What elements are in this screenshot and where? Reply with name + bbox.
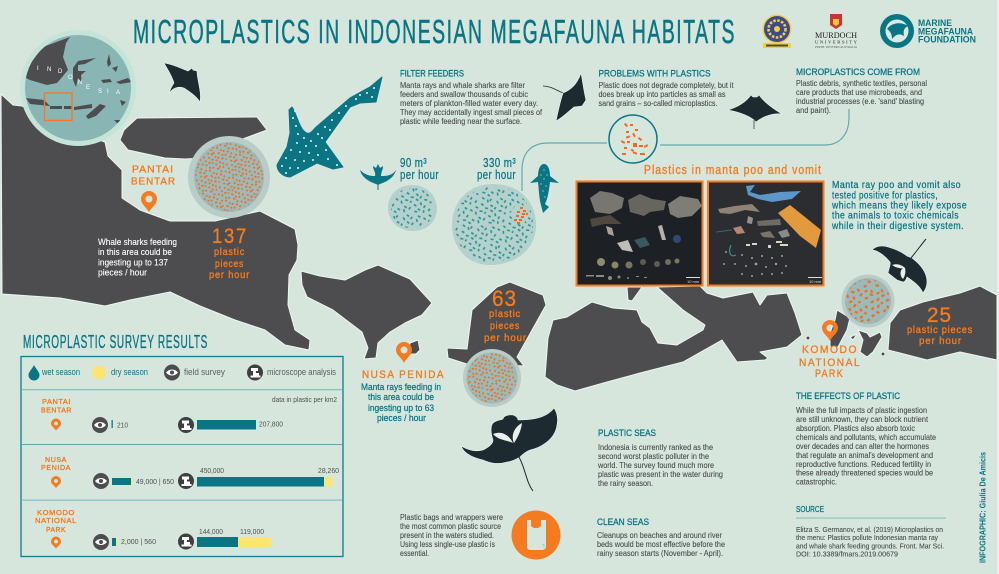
text block: clean seas: rainy season starts (November - April). (597, 548, 723, 558)
callout: 63 pieces per hour: plastic (489, 308, 521, 320)
chart: Komodo plastic sample (842, 274, 894, 328)
row: Pantai Bentar: BENTAR (41, 406, 72, 414)
text block: plastic bags (400, 512, 503, 558)
text block: effects of plastic (796, 391, 936, 486)
callout: 63 pieces per hour: 63 (492, 286, 517, 311)
icon: teal manta silhouette (360, 164, 396, 190)
text block: source: SOURCE (796, 505, 824, 514)
text block: clean seas: Cleanups on beaches and around river (597, 530, 722, 540)
icon: microscope (247, 364, 263, 380)
location: Nusa Penida (361, 342, 445, 424)
connector arrow: microplastics sources to whale shark (522, 109, 849, 191)
logo: Marine Megafauna Foundation: MARINE (918, 18, 952, 28)
row: Komodo National Park (35, 508, 271, 550)
chart: 90 m3 water blob (388, 185, 437, 231)
legend: microscope analysis (267, 367, 336, 377)
text block: plastic bags: essential. (400, 548, 429, 558)
text block: manta ray poo and vomit: the animals to toxic chemicals (832, 210, 959, 222)
legend: wet season (41, 367, 80, 377)
icon: large manta ray (461, 408, 558, 491)
text block: manta ray poo and vomit: which means they likely expose (831, 200, 967, 212)
location: Komodo National Park: KOMODO (802, 344, 858, 356)
text block: whale sharks feeding (98, 237, 177, 278)
text block: microplastics come from: industrial processes (e.e. 'sand' blasting (796, 96, 924, 106)
callout: 137 pieces per hour: pieces (215, 258, 244, 270)
row: Nusa Penida: 49,000 | 650 (136, 477, 174, 486)
callout: 25 pieces per hour: per hour (919, 335, 962, 347)
icon: pin (141, 191, 157, 212)
text block: problems with plastics: does break up into particles as small as (598, 89, 726, 99)
callout: 25 pieces per hour: 25 (927, 304, 952, 327)
location: Pantai Bentar (131, 164, 176, 212)
logo: Murdoch University: MURDOCH (815, 31, 857, 40)
row: Pantai Bentar: 207,800 (259, 420, 283, 428)
text block: whale sharks feeding: ingesting up to 137 (98, 258, 168, 268)
logo: Marine Megafauna Foundation (880, 14, 976, 48)
icon: field survey eye (164, 364, 180, 380)
legend (28, 364, 336, 381)
label: 330 cubic metres per hour: 330 m³ (483, 156, 516, 170)
legend: field survey (184, 367, 225, 377)
text block: filter feeders: FILTER FEEDERS (400, 68, 464, 80)
label: 330 cubic metres per hour: per hour (477, 168, 516, 182)
location: Komodo National Park: NATIONAL (799, 357, 861, 369)
right page edge (998, 0, 999, 574)
location: Pantai Bentar: BENTAR (131, 176, 176, 188)
heading: plastics in manta poo and vomit: Plastics in manta poo and vomit (644, 163, 822, 177)
icon: right manta ray (872, 239, 927, 293)
location: Nusa Penida: this area could be (368, 392, 434, 403)
text block: whale sharks feeding: pieces / hour (98, 268, 148, 278)
location: Komodo National Park: PARK (815, 368, 844, 380)
logo: Marine Megafauna Foundation: FOUNDATION (918, 34, 976, 44)
map: land masses (1, 94, 997, 391)
text block: filter feeders: plastic while feeding near the surface. (400, 116, 522, 126)
logo: Murdoch University (815, 14, 858, 49)
logo: university seal (762, 14, 792, 48)
text block: microplastics come from (796, 67, 927, 115)
icon: manta top right (728, 95, 782, 129)
text block: source: and whale shark feeding grounds. Front. Mar Sci. (796, 542, 944, 550)
row: Komodo National Park: PARK (46, 525, 66, 534)
label: 330 cubic metres per hour (477, 156, 516, 182)
text block: filter feeders: They may accidentally ingest small pieces of (400, 107, 543, 117)
locator globe (20, 30, 136, 146)
row: Komodo National Park: KOMODO (37, 508, 75, 517)
text block: effects of plastic: these already threatened species would be (796, 468, 933, 478)
text block: manta ray poo and vomit (831, 180, 967, 232)
text block: problems with plastics: Plastic does not degrade completely, but it (598, 80, 734, 90)
text block: whale sharks feeding: Whale sharks feeding (98, 237, 177, 248)
row: Komodo National Park: NATIONAL (35, 516, 77, 525)
text block: effects of plastic: that regulate an animal's development and (796, 450, 933, 460)
text block: microplastics come from: Plastic debris, synthetic textiles, personal (796, 78, 927, 88)
text block: problems with plastics: PROBLEMS WITH PLASTICS (598, 68, 710, 80)
row: Komodo National Park: 144,000 (199, 527, 223, 536)
icon: wet season drop (28, 365, 40, 381)
label: 90 cubic metres per hour: per hour (400, 168, 439, 182)
text block: microplastics come from: and paint). (796, 105, 831, 115)
text block: source: DOI: 10.3389/fmars.2019.00679 (796, 550, 898, 558)
panel: survey results (21, 356, 343, 556)
chart: Nusa Penida plastic sample (463, 349, 521, 407)
photo scale label: 10 mm (687, 279, 700, 284)
text block: plastic bags: Using less single-use plastic is (400, 539, 495, 549)
row: Pantai Bentar: PANTAI (42, 397, 71, 406)
text block: filter feeders: meters of plankton-filled water every day. (400, 98, 538, 108)
text block: source: Elitza S. Germanov, et al. (2019) Microplastics on (796, 525, 943, 534)
location: Nusa Penida: Manta rays feeding in (361, 382, 441, 393)
text block: plastic seas: world. The survey found much more (597, 460, 714, 470)
text block: plastic bags: Plastic bags and wrappers were (400, 512, 503, 522)
callout: 25 pieces per hour (907, 304, 973, 347)
callout: 25 pieces per hour: plastic pieces (907, 324, 973, 336)
chart: Pantai Bentar plastic sample (188, 136, 270, 218)
text block: plastic bags: the most common plastic source (400, 521, 501, 531)
text block: plastic bags: present in the waters studied. (400, 530, 494, 540)
text block: microplastics come from: MICROPLASTICS COME FROM (796, 67, 920, 78)
text block: source (796, 505, 946, 558)
callout: 63 pieces per hour: pieces (490, 320, 520, 332)
text block: effects of plastic: are still unknown, they can block nutrient (796, 414, 929, 424)
text block: source: the menu: Plastics pollute Indonesian manta ray (796, 533, 938, 542)
label: 90 cubic metres per hour (400, 156, 439, 182)
location: Nusa Penida: ingesting up to 63 (368, 403, 434, 414)
text block: plastic seas: the rainy season. (598, 478, 653, 488)
text block: filter feeders: feeders and swallow thousands of cubic (400, 89, 529, 99)
icon: small whale shark (530, 164, 559, 213)
text block: effects of plastic: absorption. Plastics also absorb toxic (796, 423, 916, 433)
row: Nusa Penida: 450,000 (200, 466, 224, 475)
credit: infographic author: INFOGRAPHIC: Giulia De Amicis (978, 452, 988, 563)
label: 90 cubic metres per hour: 90 m³ (400, 156, 427, 170)
text block: microplastics come from: care products that use microbeads, and (796, 87, 922, 97)
text block: filter feeders (400, 68, 543, 126)
text block: problems with plastics (598, 68, 734, 108)
row: Komodo National Park: 119,000 (240, 527, 264, 536)
heading: microplastic survey results: MICROPLASTIC SURVEY RESULTS (23, 332, 208, 352)
row: Nusa Penida: 28,260 (318, 466, 339, 475)
text block: effects of plastic: While the full impacts of plastic ingestion (796, 405, 927, 415)
logo: Murdoch University: UNIVERSITY (815, 40, 858, 44)
location: Pantai Bentar: PANTAI (132, 164, 174, 176)
text block: whale sharks feeding: in this area could be (98, 247, 172, 258)
text block: clean seas: CLEAN SEAS (597, 517, 649, 528)
location: Nusa Penida: pieces / hour (377, 413, 427, 424)
text block: clean seas (597, 517, 725, 558)
text block: effects of plastic: THE EFFECTS OF PLASTIC (796, 391, 900, 402)
text block: problems with plastics: sand grains – so-called microplastics. (598, 98, 718, 108)
globe label: INDONESIA (37, 66, 120, 96)
location: Komodo National Park (799, 320, 861, 380)
text block: manta ray poo and vomit: while in their digestive system. (831, 221, 964, 232)
chart: 330 m3 water blob (452, 184, 536, 265)
text block: plastic seas: PLASTIC SEAS (598, 428, 656, 439)
text block: manta ray poo and vomit: Manta ray poo and vomit also (832, 180, 961, 191)
note: data units: data in plastic per km2 (272, 395, 337, 404)
row: Nusa Penida (41, 455, 339, 489)
text block: manta ray poo and vomit: tested positive for plastics, (832, 190, 938, 202)
row: Nusa Penida: NUSA (45, 455, 67, 464)
logo: Marine Megafauna Foundation: MEGAFAUNA (918, 26, 973, 36)
icon: plastic bag (512, 510, 560, 560)
logo: Murdoch University: PERTH, WESTERN AUSTRALIA (815, 46, 857, 49)
text block: effects of plastic: catastrophic. (796, 476, 837, 486)
photo: plastics in manta vomit (708, 182, 824, 286)
row: Pantai Bentar: 210 (117, 420, 128, 430)
text block: plastic seas: second worst plastic polluter in the (598, 451, 709, 461)
row: Komodo National Park: 2,000 | 560 (121, 537, 156, 546)
icon: large whale shark (277, 77, 382, 177)
callout: 63 pieces per hour: per hour (484, 332, 527, 344)
callout: 63 pieces per hour (484, 286, 527, 344)
text block: effects of plastic: chemicals and pollutants, which accumulate (796, 432, 936, 442)
location: Nusa Penida: NUSA PENIDA (362, 369, 445, 381)
legend: dry season (111, 367, 148, 377)
callout: 137 pieces per hour: 137 (212, 225, 248, 248)
text block: effects of plastic: over decades and can alter the hormones (796, 441, 929, 451)
callout: 137 pieces per hour: per hour (209, 269, 250, 281)
row: Nusa Penida: PENIDA (41, 463, 71, 472)
text block: plastic seas: plastic was present in the water during (598, 469, 723, 479)
photo: plastics in manta poo (576, 182, 702, 286)
icon: small manta top left (164, 63, 200, 102)
text block: clean seas: beds would be most effective before the (597, 539, 725, 549)
text block: filter feeders: Manta rays and whale sharks are filter (400, 80, 525, 90)
callout: 137 pieces per hour: plastic (214, 246, 245, 258)
text block: plastic seas (597, 428, 723, 488)
text block: plastic seas: Indonesia is currently ranked as the (598, 442, 713, 452)
icon: microplastics circle (609, 115, 657, 163)
photo scale label: 10 mm (809, 279, 822, 284)
icon: manta beside filter feeders (543, 73, 586, 121)
row: Pantai Bentar (41, 397, 283, 433)
text block: effects of plastic: reproductive functions. Reduced fertility in (796, 459, 931, 469)
callout: 137 pieces per hour (209, 225, 250, 281)
